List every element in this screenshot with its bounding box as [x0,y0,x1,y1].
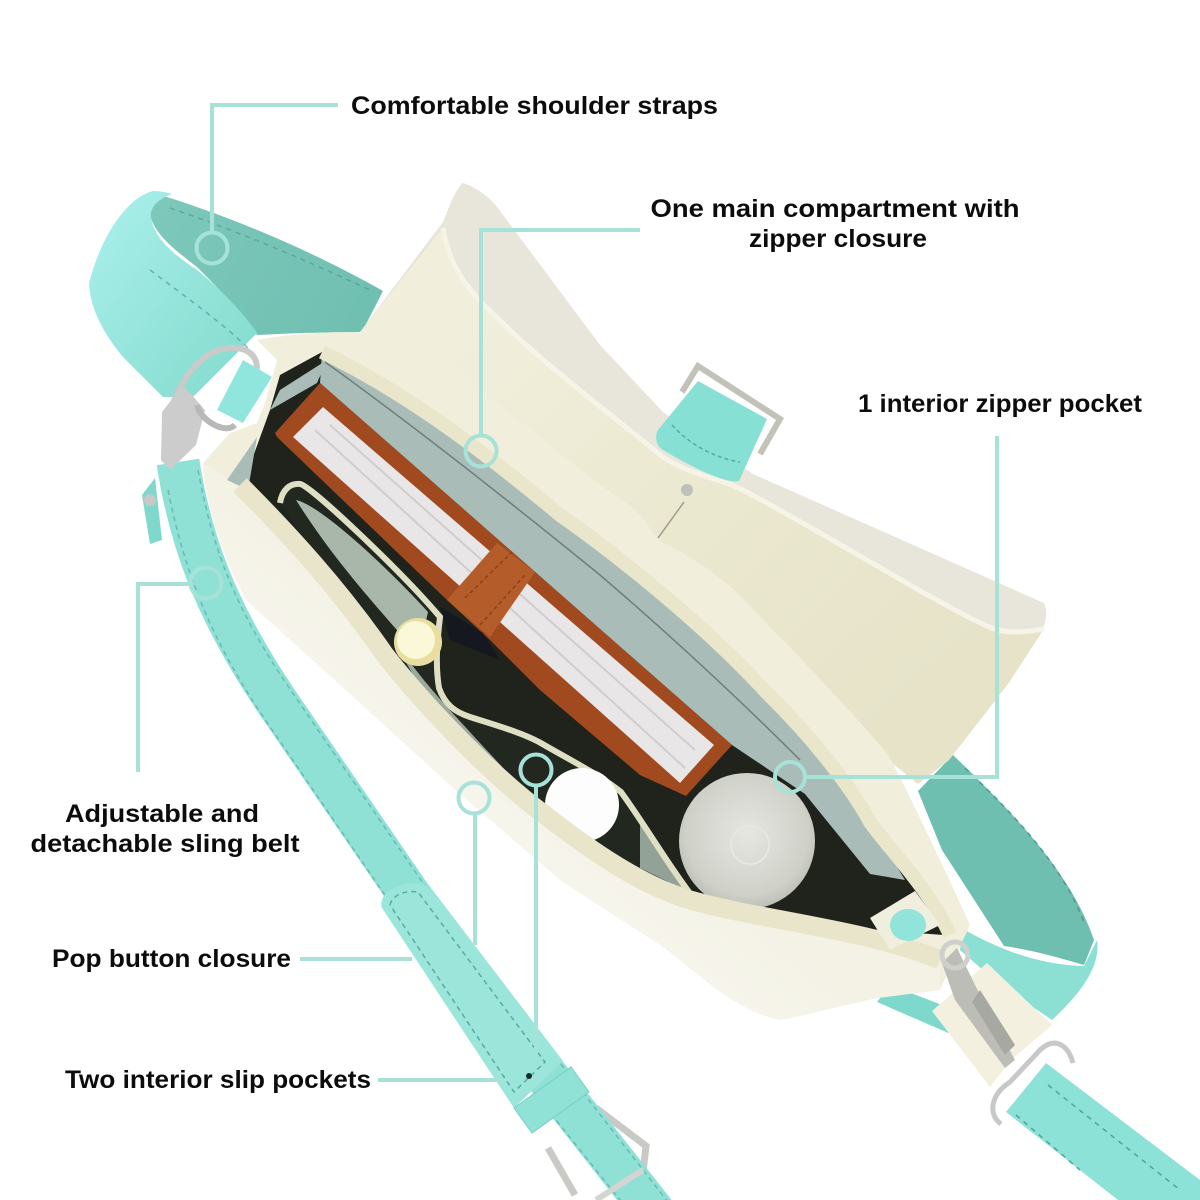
callout line: shoulder straps [196,105,338,264]
notebook [275,383,732,796]
label: sling belt: Adjustable and [65,800,259,828]
shoulder strap, front end with ring [993,1043,1200,1200]
belt keeper strap [381,883,563,1108]
label: sling belt: detachable sling belt [30,830,300,858]
label: sling belt [30,800,300,858]
callout line: main compartment [466,230,640,466]
label: main compartment: One main compartment with [650,195,1020,223]
callout line: sling belt [138,568,222,772]
hardware: zipper pull, tab and tag, right [870,891,1052,1087]
shoulder strap, right loop [877,755,1097,1040]
shoulder strap, back loop [89,191,383,397]
callout line: interior zipper pocket [775,436,997,792]
flap of the bag [360,183,1046,784]
callout line: pop button closure [300,782,490,959]
bag body [203,332,970,1020]
label: main compartment: zipper closure [749,225,927,253]
front pocket zipper [240,485,940,960]
bag interior [227,352,945,935]
detachable sling belt [142,462,678,1200]
label: slip pockets: Two interior slip pockets [65,1066,371,1094]
label: shoulder straps: Comfortable shoulder straps [351,92,718,120]
flap strap with buckle [656,366,780,481]
callout line: slip pockets [378,754,552,1080]
belt loop and buckle bar [514,1067,643,1200]
label: interior zipper pocket: 1 interior zipper pocket [858,390,1143,418]
interior slip pocket [280,484,689,892]
cosmetics: lipstick, compact and ball [394,618,815,909]
label: main compartment [650,195,1020,253]
zipper of main compartment [322,352,950,935]
label: pop button closure: Pop button closure [52,945,291,973]
hardware: ring and strap tab, left [144,348,272,506]
belt buckle frame [548,1108,646,1195]
